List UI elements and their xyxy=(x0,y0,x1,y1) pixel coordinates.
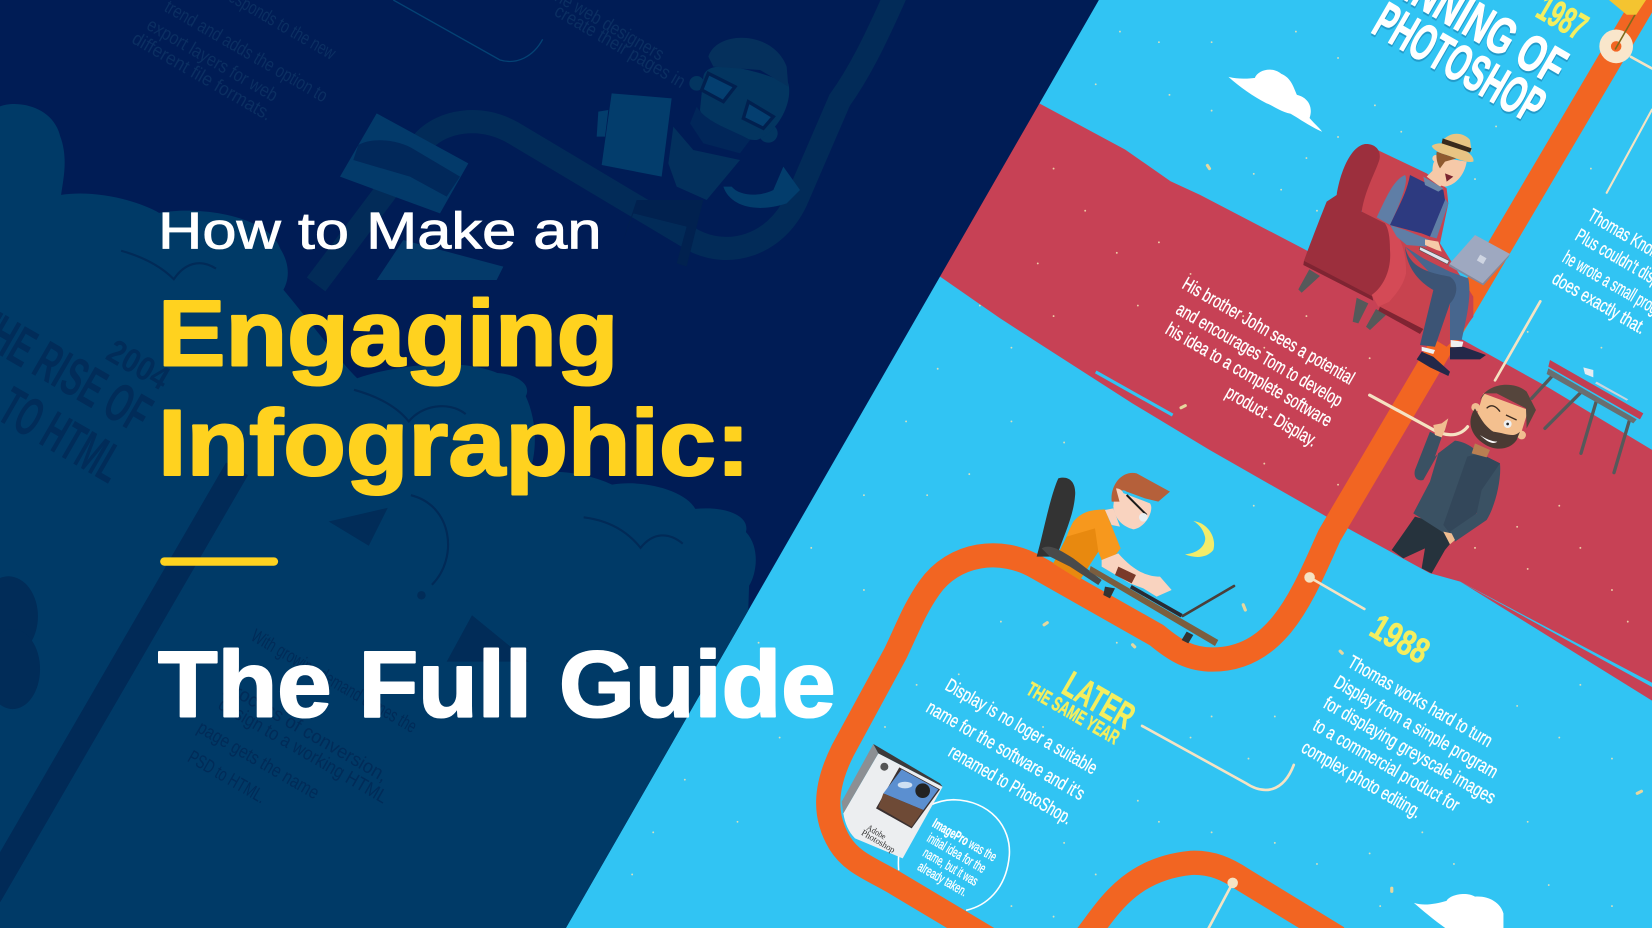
orange timeline path xyxy=(828,0,1648,928)
product box: Adobe Photoshop: Photoshop xyxy=(860,827,897,855)
ghost text: lower paragraph: PSD to HTML. xyxy=(184,747,269,808)
text block: later description: Display is no loger a suitable xyxy=(942,675,1101,779)
ghost text: lower paragraph: design to a working HTML xyxy=(215,694,391,808)
illustration: man on armchair with laptop xyxy=(1298,134,1510,376)
text block: ImagePro note: name, but it was xyxy=(920,845,981,889)
title: Infographic: Infographic: xyxy=(158,390,750,495)
text block: ImagePro note xyxy=(915,816,999,899)
ghost text: lower paragraph: page gets the name xyxy=(193,717,323,804)
text block: brother John xyxy=(1162,274,1358,452)
ghost text: rise of HTML xyxy=(0,312,170,484)
heading: Later the same year: THE SAME YEAR xyxy=(1023,679,1123,749)
ghost text: rise of HTML: 2004 xyxy=(100,332,176,398)
icon: crescent moon xyxy=(1185,521,1214,557)
ghost timeline road xyxy=(0,469,237,896)
ghost bird outlines xyxy=(121,251,683,585)
text block: ImagePro note: initial idea for the xyxy=(925,830,989,876)
ghost clouds xyxy=(0,104,756,928)
text block: 1988 description: for displaying greyscale images xyxy=(1320,693,1499,809)
heading: Later the same year: LATER xyxy=(1056,664,1142,737)
year: 1988: 1988 xyxy=(1364,607,1436,672)
text block: 1988 description xyxy=(1298,652,1501,823)
divider xyxy=(160,557,278,566)
text block: ImagePro note: already taken. xyxy=(915,859,970,899)
title: How to Make an: How to Make an xyxy=(158,202,602,260)
text block: ImagePro note: ImagePro was the xyxy=(930,816,999,864)
ghost lower shapes xyxy=(0,508,529,709)
speckles xyxy=(632,32,1641,917)
text block: brother John: product - Display. xyxy=(1222,382,1321,452)
ghost text: lower paragraph: process of conversion, xyxy=(221,676,391,787)
text block: 1988 description: Thomas works hard to turn xyxy=(1344,652,1496,752)
ghost figures xyxy=(340,0,800,280)
text block: Thomas Knoll xyxy=(1548,205,1652,340)
text block: later description xyxy=(923,675,1101,829)
text block: 1988 description: complex photo editing. xyxy=(1298,737,1425,823)
top milestone ring xyxy=(1599,0,1647,63)
product box: Adobe Photoshop xyxy=(842,744,943,858)
icon: cloud top xyxy=(1228,70,1322,132)
red carpet band xyxy=(927,97,1652,701)
illustration: bearded man winking xyxy=(1392,385,1536,573)
text block: brother John: and encourages Tom to develop xyxy=(1172,299,1346,412)
ghost text: lower paragraph xyxy=(184,626,420,808)
ghost text: top paragraph: different file formats. xyxy=(128,28,276,125)
ghost timeline top xyxy=(316,0,896,284)
text block: 1988 description: Display from a simple program xyxy=(1330,672,1501,783)
product box: Adobe Photoshop: Adobe xyxy=(865,822,888,841)
ghost text: lower paragraph: With growing demand comes the xyxy=(247,626,420,738)
heading: Beginning of Photoshop xyxy=(1331,0,1577,135)
heading: Later the same year xyxy=(1023,664,1142,749)
ghost text: top paragraph: trend and adds the option to xyxy=(161,0,331,107)
text block: brother John: his idea to a complete software xyxy=(1162,319,1336,432)
connector lines xyxy=(1142,57,1652,928)
icon: cloud bottom xyxy=(1414,894,1503,928)
text block: brother John: His brother John sees a potential xyxy=(1179,274,1358,389)
title: The Full Guide: The Full Guide xyxy=(158,631,835,736)
panel: navy overlay xyxy=(0,0,1159,928)
title: Engaging: Engaging xyxy=(158,281,618,386)
text block: 1988 description: to a commercial product for xyxy=(1309,715,1463,816)
ghost text: top paragraph: export layers for web xyxy=(143,15,281,107)
illustration: side table xyxy=(1532,360,1643,473)
illustration: man at desk at night xyxy=(1037,473,1234,646)
text block: later description: name for the software and it's xyxy=(923,697,1088,805)
text block: later description: renamed to PhotoShop. xyxy=(945,742,1076,829)
ghost text: top paragraph xyxy=(128,0,689,125)
callout circle: ImagePro note xyxy=(898,800,1009,910)
ghost text: top paragraph: create their pages in xyxy=(551,1,689,93)
